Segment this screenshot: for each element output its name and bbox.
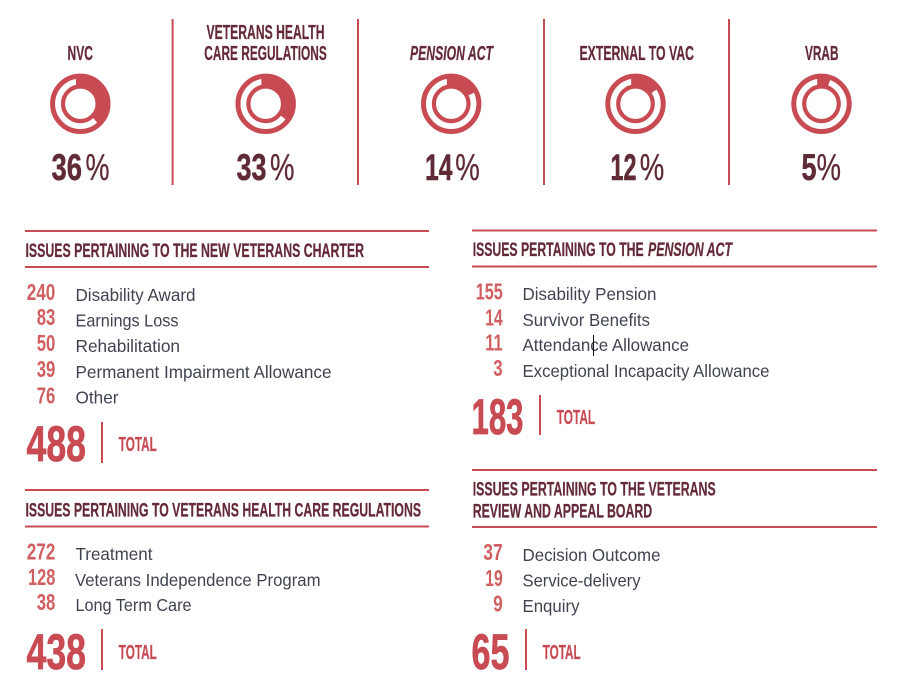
list: issue counts: Survivor Benefits — [522, 310, 650, 330]
panel: New Veterans Charter issues — [25, 230, 429, 472]
panel: Veterans Health Care Regulations issues — [25, 489, 429, 680]
list: issue counts: 19 — [485, 565, 503, 591]
total: 183: TOTAL — [557, 407, 595, 429]
heading: Veterans Health Care Regulations: CARE REGULATIONS — [204, 43, 327, 65]
list: issue counts: 240 — [27, 279, 55, 305]
list: issue counts: 76 — [37, 382, 55, 408]
list: issue counts: 9 — [493, 590, 503, 616]
list: issue counts: 50 — [37, 330, 55, 356]
list: issue counts: Veterans Independence Program — [75, 570, 320, 590]
value: 14%: % — [455, 146, 480, 188]
stat column: External to VAC 12% — [580, 43, 694, 188]
list: issue counts: Service-delivery — [522, 571, 641, 591]
stat column: NVC 36% — [52, 43, 110, 188]
panel: Pension Act issues — [472, 230, 877, 445]
heading: Pension Act: PENSION ACT — [410, 43, 494, 65]
total: 183: 183 — [472, 388, 524, 445]
list: issue counts: Decision Outcome — [522, 545, 660, 565]
list: issue counts: Other — [76, 388, 119, 408]
list: issue counts: Permanent Impairment Allowance — [76, 362, 332, 382]
value: 33%: 33 — [236, 146, 266, 188]
heading: Pension Act: ISSUES PERTAINING TO THE — [473, 239, 644, 261]
list: issue counts: Disability Pension — [522, 284, 656, 304]
list: issue counts: Earnings Loss — [76, 310, 179, 330]
icon: ring gauge 12% — [608, 74, 663, 132]
list: issue counts: 14 — [485, 304, 503, 330]
list: issue counts — [483, 539, 660, 616]
list: issue counts: Disability Award — [76, 285, 196, 305]
heading: Veterans Health Care Regulations — [204, 22, 327, 65]
list: issue counts: Enquiry — [522, 596, 580, 616]
heading: New Veterans Charter: ISSUES PERTAINING TO THE NEW VETERANS CHARTER — [26, 240, 364, 262]
heading: Veterans Health Care Regulations: ISSUES PERTAINING TO VETERANS HEALTH CARE REGULATIONS — [26, 499, 421, 521]
total: 65: 65 — [472, 623, 510, 680]
total: 488: TOTAL — [119, 434, 157, 456]
value: 36%: % — [86, 146, 110, 188]
list: issue counts: 3 — [493, 355, 503, 381]
total: 488: 488 — [26, 415, 86, 472]
text cursor artifact — [593, 335, 594, 356]
list: issue counts — [27, 538, 320, 615]
list: issue counts — [476, 278, 770, 381]
value: 33%: % — [270, 146, 294, 188]
total: 65 — [472, 623, 581, 680]
list: issue counts: 39 — [37, 356, 55, 382]
heading: VRAB: VRAB — [805, 43, 838, 65]
list: issue counts: Exceptional Incapacity Allowance — [522, 361, 770, 381]
list: issue counts: 272 — [27, 538, 55, 564]
value: 12%: 12 — [610, 146, 636, 188]
heading: Pension Act: PENSION ACT — [648, 239, 733, 261]
list: issue counts: 128 — [28, 564, 55, 590]
heading: Veterans Review and Appeal Board: REVIEW AND APPEAL BOARD — [473, 500, 652, 522]
total: 438: 438 — [26, 623, 86, 680]
stat column: VRAB 5% — [794, 43, 849, 188]
list: issue counts: Attendance Allowance — [522, 335, 689, 355]
icon: ring gauge 36% — [53, 75, 109, 132]
total: 65: TOTAL — [543, 642, 581, 664]
value: 14%: 14 — [425, 146, 453, 188]
value: 5%: 5 — [802, 146, 816, 188]
total: 488 — [26, 415, 157, 472]
total: 438: TOTAL — [119, 642, 157, 664]
total: 183 — [472, 388, 595, 445]
value: 5% — [802, 146, 841, 188]
list: issue counts: 11 — [485, 329, 503, 355]
list: issue counts — [27, 279, 331, 408]
value: 12%: % — [640, 146, 664, 188]
list: issue counts: 37 — [483, 539, 503, 565]
panel: Veterans Review and Appeal Board issues — [472, 469, 877, 680]
value: 5%: % — [816, 146, 841, 188]
icon: ring gauge 33% — [238, 75, 295, 132]
heading: External to VAC: EXTERNAL TO VAC — [580, 43, 694, 65]
list: issue counts: 83 — [37, 304, 55, 330]
heading: Veterans Review and Appeal Board: ISSUES PERTAINING TO THE VETERANS — [473, 479, 716, 501]
list: issue counts: 38 — [37, 589, 55, 615]
icon: ring gauge 14% — [424, 74, 479, 132]
heading: Veterans Review and Appeal Board — [473, 479, 716, 522]
heading: Veterans Health Care Regulations: VETERANS HEALTH — [206, 22, 324, 44]
stat column: Veterans Health Care Regulations 33% — [204, 22, 327, 188]
stat column: Pension Act 14% — [410, 43, 494, 188]
heading: NVC: NVC — [68, 43, 93, 65]
total: 438 — [26, 623, 157, 680]
list: issue counts: Long Term Care — [76, 595, 192, 615]
list: issue counts: Treatment — [76, 544, 153, 564]
value: 36%: 36 — [52, 146, 82, 188]
list: issue counts: Rehabilitation — [76, 336, 180, 356]
list: issue counts: 155 — [476, 278, 503, 304]
icon: ring gauge 5% — [794, 74, 849, 132]
